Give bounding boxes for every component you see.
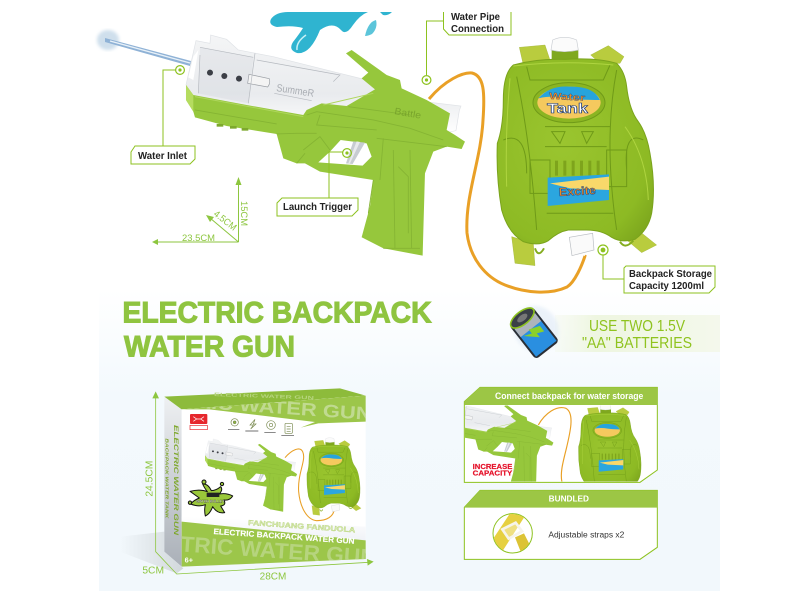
box feature icons — [228, 419, 294, 436]
age mark: 6+ — [185, 555, 193, 564]
box top flap — [164, 388, 366, 409]
box hose — [285, 449, 334, 521]
box gun image — [205, 439, 297, 512]
gun dimensions: 23.5CM — [182, 233, 215, 244]
increase capacity text: INCREASE — [473, 462, 512, 471]
box dimension arrows: 24.5CM — [144, 461, 155, 497]
gun brand text SummeR: SummeR — [276, 82, 315, 100]
gun dimensions: 15CM — [238, 201, 249, 226]
bundled header — [464, 490, 657, 508]
backpack text: Excite: Excite — [559, 185, 596, 199]
light blue lower panel background — [99, 290, 720, 591]
box faded title top: RIC WATER GUN — [195, 392, 372, 424]
panel header — [464, 387, 657, 405]
callout: water pipe connection: Connection — [451, 24, 504, 35]
panel: connect backpack for water storage: Connect backpack for water storage — [495, 391, 643, 401]
callout: backpack storage capacity: Capacity 1200ml — [629, 281, 704, 292]
box splat badge: WATER BULLET — [196, 499, 225, 504]
gun brand text Battle: Battle — [393, 106, 422, 122]
battery text: USE TWO 1.5V — [589, 318, 685, 335]
panel: bundled — [464, 490, 657, 559]
callout: water pipe connection — [422, 12, 511, 84]
battery banner — [504, 297, 720, 361]
panel: bundled: BUNDLED — [549, 494, 589, 504]
box dimension arrows — [142, 391, 374, 582]
box dimension arrows: 5CM — [142, 565, 164, 576]
box backpack image — [307, 438, 361, 515]
product box with dimensions — [120, 388, 378, 582]
box side: ELECTRIC WATER GUN — [172, 425, 179, 535]
box top flap: ELECTRIC WATER GUN — [214, 392, 315, 402]
title: WATER GUN — [124, 330, 295, 364]
icon: adjustable strap — [492, 513, 533, 554]
callout: water pipe connection: Water Pipe — [451, 12, 500, 23]
callout: backpack storage capacity — [598, 245, 715, 293]
strap text: Adjustable straps x2 — [548, 530, 625, 539]
gun dimensions: 4.5CM — [211, 209, 238, 233]
box side — [164, 397, 182, 567]
box title: ELECTRIC BACKPACK WATER GUN — [213, 527, 355, 546]
gun dimensions — [152, 177, 249, 245]
panel: connect backpack for water storage — [464, 386, 658, 483]
battery text: "AA" BATTERIES — [582, 335, 692, 352]
icon: battery — [504, 297, 568, 361]
box subtitle: FANCHUANG FANDUOLA — [248, 518, 356, 535]
increase capacity text — [473, 462, 512, 478]
box shadow — [120, 532, 183, 573]
box front — [182, 396, 366, 567]
box side: BACKPACK WATER TANK — [164, 438, 169, 520]
callout: launch trigger — [277, 149, 358, 216]
callout: backpack storage capacity: Backpack Storage — [629, 269, 712, 280]
increase capacity text: CAPACITY — [473, 469, 512, 478]
box dimension arrows: 28CM — [260, 571, 286, 582]
backpack text: Water Tank: Water — [549, 91, 586, 104]
hero water splash — [270, 12, 392, 53]
battery text — [582, 318, 692, 352]
backpack text: Water Tank — [547, 91, 589, 116]
callout: water inlet — [131, 66, 195, 164]
callout: water inlet: Water Inlet — [138, 151, 188, 162]
water gun — [186, 35, 465, 256]
box splat badge — [188, 480, 233, 516]
backpack text: Water Tank: Tank — [547, 101, 589, 116]
hose end — [581, 255, 586, 268]
title — [122, 296, 432, 364]
box faded title bottom: TRIC WATER GUN — [180, 531, 378, 570]
title: ELECTRIC BACKPACK — [122, 296, 432, 330]
water pipe hose — [429, 73, 585, 292]
panel illustration — [465, 405, 642, 482]
water jet from gun — [97, 30, 191, 66]
box logo — [190, 414, 207, 430]
backpack water tank — [497, 37, 657, 268]
callout: launch trigger: Launch Trigger — [283, 202, 352, 213]
